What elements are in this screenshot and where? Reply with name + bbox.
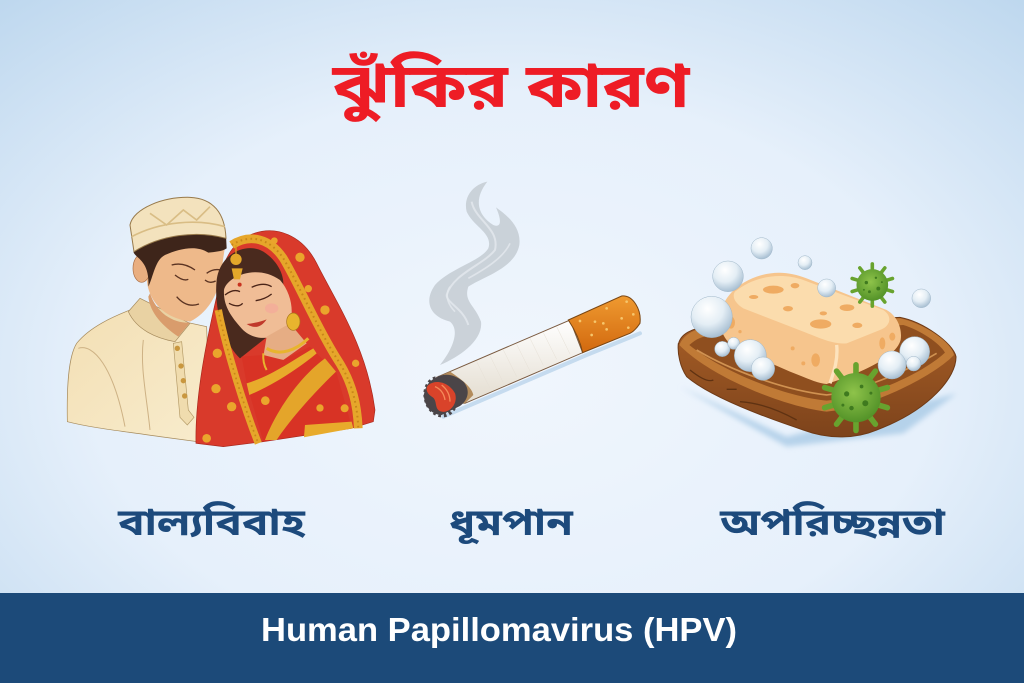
bubbles (691, 238, 931, 380)
illustration: cigarette with smoke (423, 182, 640, 417)
label: uncleanliness: অপরিচ্ছন্নতা (719, 502, 946, 551)
dish (678, 317, 956, 437)
cigarette shadow (443, 333, 640, 417)
groom (67, 197, 227, 443)
illustration: soap on dish with germs (678, 238, 957, 447)
filter (568, 296, 640, 353)
bride (196, 231, 375, 447)
illustration: child marriage couple (67, 197, 375, 447)
footer text: Human Papillomavirus (HPV) (261, 611, 737, 648)
label: child marriage: বাল্যবিবাহ (117, 502, 306, 551)
dish shadow (680, 387, 957, 447)
germ: small (852, 264, 892, 306)
label: smoking: ধূমপান (449, 502, 574, 551)
smoke (429, 182, 520, 365)
footer banner (0, 593, 1024, 683)
soap bar (720, 273, 901, 384)
burnt tip (423, 375, 468, 417)
cigarette body (437, 320, 583, 403)
title: ঝুঁকির কারণ (331, 51, 691, 133)
germ: large (825, 365, 887, 430)
